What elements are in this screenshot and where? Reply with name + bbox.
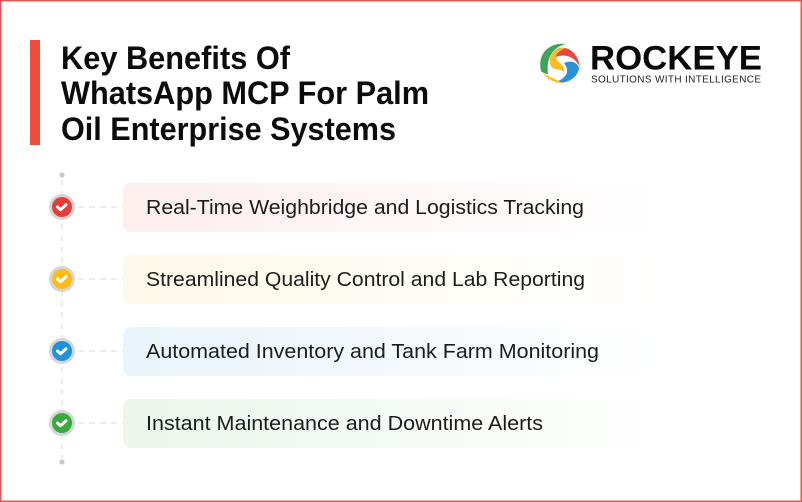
title accent bar — [30, 40, 40, 145]
label: Streamlined Quality Control and Lab Reporting — [146, 269, 585, 291]
card — [123, 327, 660, 376]
logo: Rockeye — [540, 40, 762, 86]
title: WhatsApp MCP For Palm — [61, 75, 429, 111]
timeline spine — [62, 180, 123, 458]
logo tagline: SOLUTIONS WITH INTELLIGENCE — [591, 74, 761, 86]
icon: yellow check — [49, 266, 75, 292]
logo wordmark: ROCKEYE — [590, 40, 762, 78]
icon: swirl logo mark — [540, 44, 580, 83]
icon: green check — [49, 410, 75, 436]
card — [123, 183, 660, 232]
icon: blue check — [49, 338, 75, 364]
icon: red check — [49, 194, 75, 220]
item 3: inventory — [49, 327, 660, 376]
title: Key Benefits Of — [61, 40, 290, 76]
label: Instant Maintenance and Downtime Alerts — [146, 413, 543, 435]
card — [123, 399, 660, 448]
label: Real-Time Weighbridge and Logistics Tracking — [146, 197, 584, 219]
label: Automated Inventory and Tank Farm Monitoring — [146, 341, 599, 363]
card — [123, 255, 660, 304]
item 2: quality control — [49, 255, 660, 304]
item 4: maintenance — [49, 399, 660, 448]
item 1: weighbridge — [49, 183, 660, 232]
title — [61, 40, 429, 147]
title: Oil Enterprise Systems — [61, 111, 396, 147]
